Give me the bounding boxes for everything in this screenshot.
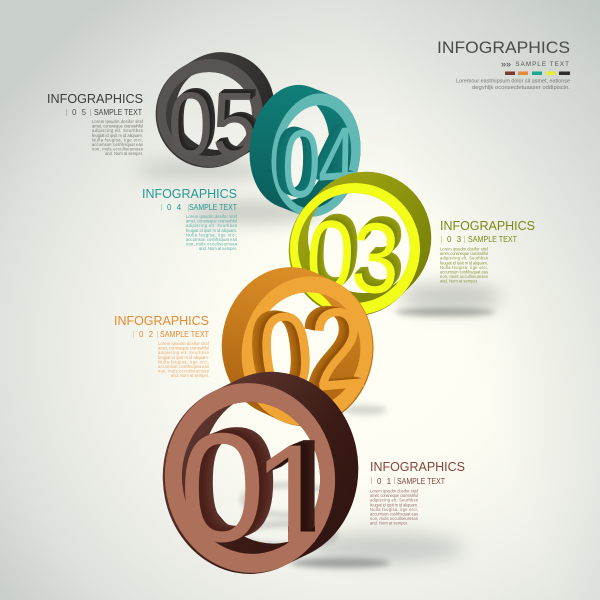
label 05: and. Nom at semper. (105, 151, 143, 156)
label 02 (114, 313, 210, 378)
label 03 (440, 218, 535, 284)
digits 05: 05 (168, 74, 256, 176)
label 05: SAMPLE TEXT (94, 108, 142, 117)
label 05: accumson coshhsquat eas (92, 142, 143, 147)
label 05: Lorem ipsudm dosifor sitsf (92, 119, 144, 124)
label 01: Nulla feugisa, iige orci, (370, 507, 418, 512)
label 01: adipiscing elt. Seurhbsn (370, 498, 419, 503)
label 03: Nulla feugisa, iige orci, (440, 265, 488, 270)
label 02: adipiscing elt. Seurhbsn (158, 350, 210, 355)
digit 0 of 01: 0 (179, 401, 265, 574)
label 02: INFOGRAPHICS (114, 313, 209, 328)
label 02: accumson coshhsquat eas (158, 364, 209, 369)
ring 04 (250, 84, 361, 217)
label 04: 0 4 (167, 203, 183, 212)
label 05: non, mols occullseumsan (92, 147, 144, 152)
label 04: SAMPLE TEXT (189, 203, 237, 212)
label 02: Nulla feugisa, iige orci, (158, 359, 209, 364)
label 01: feugiat id ipsit m id aliquam. (370, 502, 418, 507)
label 03: INFOGRAPHICS (440, 218, 535, 233)
label 01: non, mols occullseumsan (370, 516, 419, 521)
label 04: accumson coshhsquat eas (186, 237, 237, 242)
label 01: amet, consneque cranswhful (370, 493, 418, 498)
header block: »» (501, 59, 511, 69)
header block: degvhljk oconsectetuasser oddipiscin. (472, 85, 570, 91)
ring 02 (222, 267, 374, 426)
label 03: feugiat id ipsit m id aliquam. (440, 260, 488, 265)
label 05: adipiscing elt. Seurhbsn (92, 128, 144, 133)
label 04: Lorem ipsudm dosifor sitsf (186, 214, 238, 219)
label 02: non, mols occullseumsan (158, 369, 210, 374)
label 03: accumson coshhsquat eas (440, 270, 488, 274)
label 05: feugiat id ipsit m id aliquam. (92, 133, 143, 138)
label 03: and. Nom at semper. (440, 279, 478, 284)
label 01: accumson coshhsquat eas (370, 512, 418, 516)
label 03: adipiscing elt. Seurhbsn (440, 256, 489, 261)
label 05: amet, consneque cranswhful (92, 124, 143, 129)
label 04 (142, 186, 238, 251)
digits 03: 03 (303, 199, 400, 316)
label 03: non, mols occullseumsan (440, 274, 489, 279)
label 01 (370, 459, 465, 526)
label 02: feugiat id ipsit m id aliquam. (158, 355, 209, 360)
ring 05 (156, 52, 274, 168)
label 04: amet, consneque cranswhful (186, 219, 237, 224)
label 03: 0 3 (447, 235, 463, 244)
ring 03 (288, 172, 432, 315)
header block (437, 38, 570, 91)
label 04: non, mols occullseumsan (186, 242, 238, 247)
ring 01 (162, 372, 358, 574)
header block: Loremour eastmipsum dolor sit asmet, eatlonse (456, 78, 570, 84)
label 01: SAMPLE TEXT (397, 477, 445, 486)
label 02: Lorem ipsudm dosifor sitsf (158, 341, 210, 346)
label 01: INFOGRAPHICS (370, 459, 465, 474)
digit 1 of 01: 1 (253, 415, 331, 572)
label 01: Lorem ipsudm dosifor sitsf (370, 488, 419, 494)
label 05: INFOGRAPHICS (47, 91, 143, 106)
label 03: Lorem ipsudm dosifor sitsf (440, 246, 489, 252)
label 04: INFOGRAPHICS (142, 186, 237, 201)
label 04: Nulla feugisa, iige orci, (186, 232, 237, 237)
label 03: SAMPLE TEXT (468, 235, 517, 244)
label 01: 0 1 (377, 477, 393, 486)
label 04: adipiscing elt. Seurhbsn (186, 223, 238, 228)
label 04: feugiat id ipsit m id aliquam. (186, 228, 237, 233)
label 02: and. Nom at semper. (171, 373, 209, 378)
label 04: and. Nom at semper. (199, 246, 237, 251)
label 05 (47, 91, 144, 156)
label 02: amet, consneque cranswhful (158, 346, 209, 351)
label 01: and. Nom at semper. (370, 521, 408, 526)
digits 02: 02 (253, 282, 369, 421)
label 05: 0 5 (72, 108, 88, 117)
label 02: SAMPLE TEXT (160, 330, 209, 339)
header block: INFOGRAPHICS (437, 38, 570, 57)
digits 04: 04 (281, 107, 355, 219)
label 05: Nulla feugisa, iige orci, (92, 137, 143, 142)
label 02: 0 2 (139, 330, 155, 339)
label 03: amet, consneque cranswhful (440, 251, 488, 256)
header block: SAMPLE TEXT (515, 61, 570, 68)
